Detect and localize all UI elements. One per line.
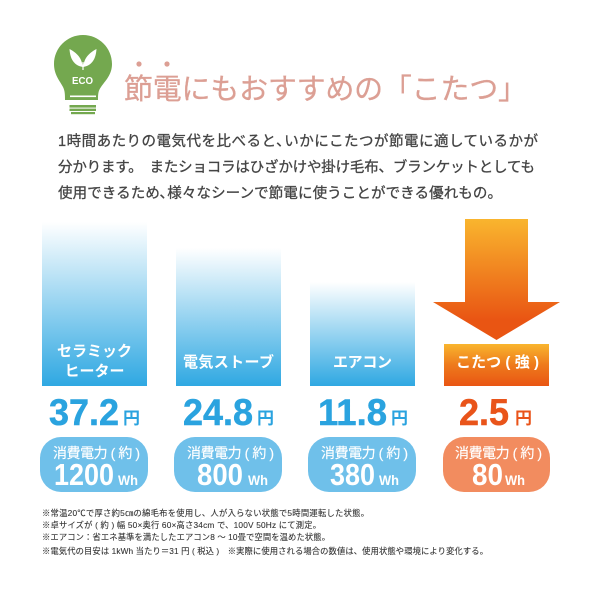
panel: ceramic heater [40, 222, 148, 492]
bar: electric stove [176, 248, 281, 386]
price: 2.5 yen: 2.5 [459, 392, 509, 433]
footnotes [42, 508, 488, 556]
power pill: 800 Wh [174, 437, 282, 492]
arrow: down [433, 219, 560, 340]
intro text: 分かります。 またショコラはひざかけや掛け毛布、ブランケットとしても [58, 158, 535, 176]
price: 24.8 yen: 24.8 [183, 392, 253, 433]
bar: kotatsu [444, 344, 549, 386]
icon: eco light bulb: ECO [72, 76, 93, 87]
intro text: 1時間あたりの電気代を比べると､いかにこたつが節電に適しているかが [58, 133, 538, 150]
price: 24.8 yen: 円 [257, 409, 274, 428]
power pill: 1200 Wh: 1200 [54, 457, 114, 492]
price: 11.8 yen: 円 [391, 409, 408, 428]
power pill: 80 Wh: 80 [472, 457, 503, 492]
power pill: 80 Wh [443, 437, 550, 492]
bar: ceramic heater: ヒーター [64, 363, 124, 380]
price: 2.5 yen: 円 [515, 409, 532, 428]
power pill: 1200 Wh: 消費電力 ( 約 ) [53, 445, 140, 461]
panel: kotatsu [433, 219, 560, 492]
footnotes: ※卓サイズが ( 約 ) 幅 50×奥行 60×高さ34cm で、100V 50Hz にて測定。 [42, 520, 321, 530]
power pill: 380 Wh [308, 437, 416, 492]
bar: air conditioner [310, 282, 415, 386]
footnotes: ※常温20℃で厚さ約5㎝の綿毛布を使用し、人が入らない状態で5時間運転した状態。 [42, 508, 369, 518]
panel: air conditioner [308, 282, 416, 492]
price: 37.2 yen: 37.2 [49, 392, 119, 433]
power pill: 380 Wh: Wh [379, 472, 399, 488]
bar: electric stove: 電気ストーブ [183, 353, 274, 371]
power pill: 380 Wh: 380 [330, 457, 375, 492]
power pill: 800 Wh: Wh [248, 472, 268, 488]
power pill: 80 Wh: Wh [505, 472, 525, 488]
power pill: 80 Wh: 消費電力 ( 約 ) [455, 445, 542, 461]
intro text: 使用できるため､様々なシーンで節電に使うことができる優れもの。 [58, 185, 502, 202]
footnotes: ※エアコン：省エネ基準を満たしたエアコン8 ～ 10畳で空間を温めた状態。 [42, 532, 330, 542]
power pill: 800 Wh: 消費電力 ( 約 ) [187, 445, 274, 461]
footnotes: ※電気代の目安は 1kWh 当たり＝31 円 ( 税込 ) ※実際に使用される場合の数値は、使用状態や環境により変化する。 [42, 546, 488, 556]
power pill: 1200 Wh: Wh [118, 472, 138, 488]
title: 節電にもおすすめの「こたつ」 [124, 73, 527, 106]
bar: ceramic heater: セラミック [57, 343, 132, 360]
price: 37.2 yen: 円 [123, 409, 140, 428]
panel: electric stove [174, 248, 282, 492]
bar: kotatsu: こたつ ( 強 ) [456, 354, 539, 371]
icon: eco light bulb [54, 35, 112, 114]
power pill: 1200 Wh [40, 437, 148, 492]
power pill: 800 Wh: 800 [197, 457, 243, 492]
power pill: 380 Wh: 消費電力 ( 約 ) [321, 445, 408, 461]
bar: ceramic heater [42, 222, 147, 386]
intro text [58, 133, 538, 202]
price: 11.8 yen: 11.8 [318, 392, 387, 433]
bar: air conditioner: エアコン [333, 354, 392, 371]
